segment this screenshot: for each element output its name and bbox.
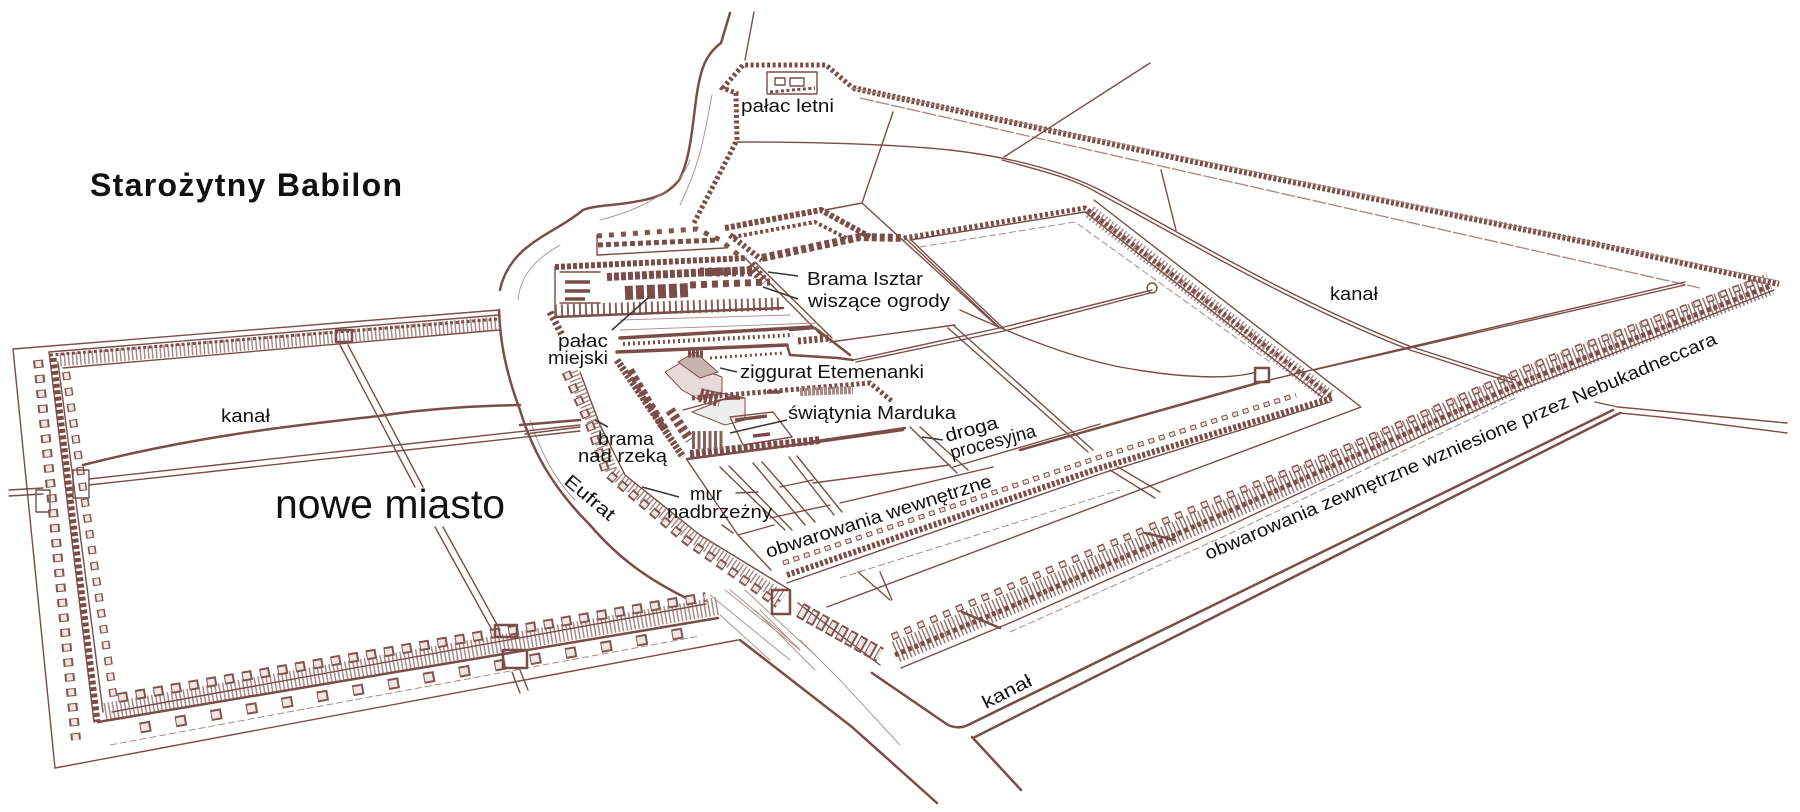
leader: Brama Isztar bbox=[768, 272, 798, 276]
north palace block bbox=[597, 210, 904, 260]
summer palace enclosure and upstream wall bbox=[694, 65, 853, 223]
label: brama nad rzeką bbox=[578, 428, 668, 466]
leader: świątynia Marduka bbox=[730, 420, 787, 433]
label: mur nadbrzeżny: nadbrzeżny bbox=[667, 501, 773, 522]
title: Starożytny Babilon bbox=[90, 167, 402, 203]
west block: new city outer boundary bbox=[13, 310, 738, 768]
label: Brama Isztar: Brama Isztar bbox=[807, 268, 923, 289]
label: pałac miejski: miejski bbox=[548, 347, 608, 368]
canals and roads of eastern city bbox=[737, 63, 1685, 467]
west block: roads bbox=[9, 345, 580, 693]
label: nowe miasto: nowe miasto bbox=[275, 481, 505, 527]
west block: west wall bbox=[36, 352, 114, 740]
temple of Marduk precinct bbox=[617, 360, 905, 459]
label: pałac miejski: pałac bbox=[558, 330, 608, 351]
label: Eufrat: Eufrat bbox=[560, 470, 620, 525]
inner city south wall bbox=[783, 395, 1332, 600]
label: pałac miejski bbox=[548, 330, 608, 368]
city palace lower terraces bbox=[617, 327, 853, 360]
west block: north wall bbox=[49, 315, 499, 368]
label: kanał west: kanał bbox=[221, 405, 270, 426]
label: brama nad rzeką: nad rzeką bbox=[578, 445, 668, 466]
label: brama nad rzeką: brama bbox=[598, 428, 655, 449]
leader: ziggurat bbox=[720, 368, 737, 372]
inner city moat bbox=[825, 200, 1361, 607]
south-east canal bbox=[872, 402, 1787, 737]
label: kanał east: kanał bbox=[1330, 283, 1378, 304]
leader: brama nad rzeką bbox=[595, 420, 608, 427]
crossing of river and walls bbox=[710, 590, 840, 680]
label: mur nadbrzeżny bbox=[667, 483, 773, 522]
leader: wiszące ogrody bbox=[763, 287, 798, 299]
label: wiszące ogrody: wiszące ogrody bbox=[807, 290, 951, 311]
label: pałac letni: pałac letni bbox=[741, 95, 834, 116]
outer wall south-east bbox=[798, 280, 1774, 668]
leader: droga procesyjna bbox=[922, 437, 943, 440]
label: ziggurat Etemenanki: ziggurat Etemenanki bbox=[740, 361, 924, 382]
label: droga procesyjna: procesyjna bbox=[948, 420, 1039, 463]
city palace and hanging gardens bbox=[550, 258, 832, 338]
label: kanał south: kanał bbox=[978, 670, 1035, 713]
label: obwarowania wewnętrzne: obwarowania wewnętrzne bbox=[763, 470, 994, 562]
outer wall north-east bbox=[853, 88, 1779, 288]
west block: south wall bbox=[98, 597, 718, 745]
label: obwarowania zewnętrzne: obwarowania zewnętrzne wzniesione przez Nebukadneccara bbox=[1201, 328, 1720, 564]
west block: canal bbox=[83, 405, 520, 465]
ziggurat Etemenanki bbox=[665, 352, 783, 400]
label: droga procesyjna: droga bbox=[943, 411, 1001, 446]
inner city north and east wall bbox=[904, 208, 1332, 397]
embankment wall bbox=[520, 372, 790, 614]
processional way and street grid bbox=[687, 427, 993, 570]
river Euphrates banks bbox=[499, 12, 1021, 803]
leader: pałac miejski bbox=[612, 298, 648, 330]
label: świątynia Marduka: świątynia Marduka bbox=[788, 402, 957, 423]
leader: mur nadbrzeżny bbox=[642, 487, 679, 497]
label: mur nadbrzeżny: mur bbox=[690, 483, 722, 504]
